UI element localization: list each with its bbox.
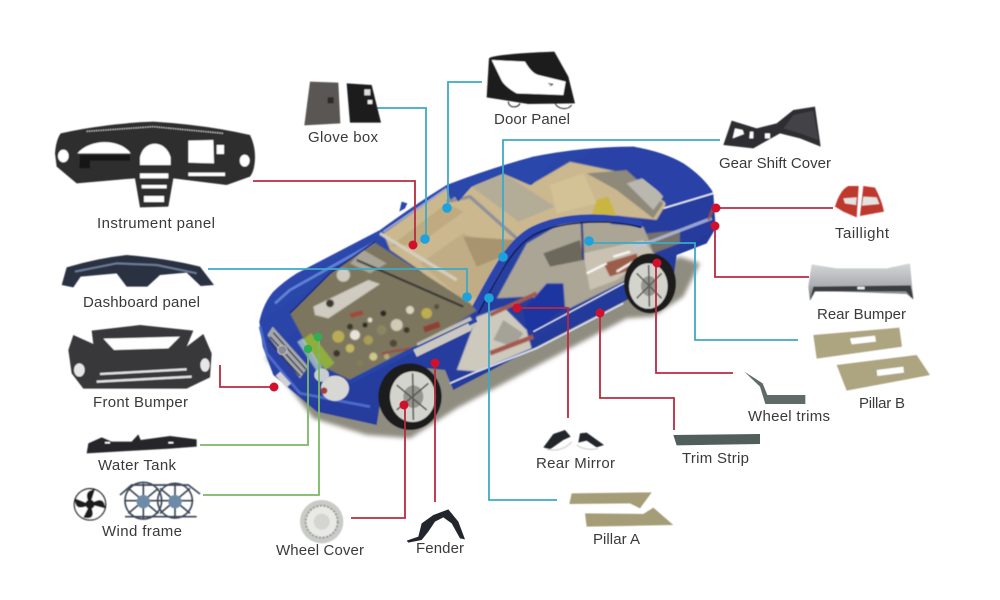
label: gear shift cover: Gear Shift Cover	[719, 155, 831, 172]
connector: taillight	[716, 207, 833, 209]
connector: pillar A	[489, 298, 557, 500]
rear wheel	[624, 253, 676, 313]
blue marker dots	[420, 203, 594, 303]
green marker dots	[304, 333, 322, 353]
part: pillar B	[813, 328, 930, 391]
fender strip	[350, 320, 477, 382]
car shadow	[265, 257, 700, 438]
part: instrument panel	[55, 122, 255, 207]
label: door panel: Door Panel	[494, 111, 570, 128]
label: fender: Fender	[416, 540, 464, 557]
connector: rear bumper	[715, 226, 809, 277]
label: glove box: Glove box	[308, 129, 378, 146]
part: trim strip	[673, 434, 760, 445]
connector: front bumper	[220, 365, 274, 387]
part: rear bumper	[808, 263, 913, 301]
double fan frame	[120, 482, 200, 519]
car cutaway illustration	[259, 147, 716, 438]
part: glove box	[304, 82, 381, 125]
door cutaway	[457, 220, 680, 372]
label: pillar B: Pillar B	[859, 395, 905, 412]
label: dashboard panel: Dashboard panel	[83, 294, 200, 311]
car body	[259, 147, 716, 425]
part: dashboard panel	[62, 255, 214, 287]
label: rear mirror: Rear Mirror	[536, 455, 615, 472]
part: door panel	[487, 52, 575, 109]
connector: door panel	[448, 82, 482, 208]
engine bay	[290, 233, 477, 380]
part: wheel trims	[744, 372, 805, 404]
connector: gear shift cover	[503, 140, 720, 257]
small fan	[74, 489, 106, 520]
label: pillar A: Pillar A	[593, 531, 640, 548]
connector: wheel cover	[351, 405, 405, 518]
side sill stripes	[450, 303, 623, 383]
connector: trim strip	[600, 313, 674, 430]
connector: water tank	[200, 349, 308, 445]
label: wheel cover: Wheel Cover	[276, 542, 364, 559]
headlight	[314, 368, 349, 401]
roof	[447, 157, 558, 202]
label: instrument panel: Instrument panel	[97, 215, 215, 232]
red marker dots	[270, 204, 720, 410]
part: gear shift cover	[723, 107, 821, 148]
part: wheel cover	[300, 500, 343, 543]
connector: fender	[434, 363, 436, 502]
part: water tank	[87, 434, 197, 453]
label: front bumper: Front Bumper	[93, 394, 188, 411]
part: taillight	[835, 186, 884, 217]
grille	[260, 327, 370, 407]
label: wind frame: Wind frame	[102, 523, 182, 540]
connector: dashboard panel	[208, 269, 467, 297]
a-pillar arch	[473, 218, 642, 312]
connector: wind frame	[203, 337, 319, 495]
part: fender	[407, 509, 465, 543]
connector: rear mirror	[517, 308, 568, 418]
label: taillight: Taillight	[835, 225, 890, 242]
label: rear bumper: Rear Bumper	[817, 306, 906, 323]
label: trim strip: Trim Strip	[682, 450, 749, 467]
hood edge	[275, 243, 373, 303]
front wheel	[378, 363, 442, 430]
label: wheel trims: Wheel trims	[748, 408, 830, 425]
connector: glove box	[377, 108, 426, 238]
part: front bumper	[68, 325, 212, 389]
cabin interior	[383, 162, 667, 308]
connector: pillar B	[590, 243, 798, 340]
part: wind frame	[74, 482, 200, 520]
connector: instrument panel	[253, 181, 415, 245]
part: rear mirror	[543, 430, 604, 450]
connector: wheel trims	[656, 263, 733, 373]
label: water tank: Water Tank	[98, 457, 176, 474]
rear deck	[590, 147, 713, 208]
part: pillar A	[569, 492, 673, 527]
wing mirror	[399, 202, 407, 212]
